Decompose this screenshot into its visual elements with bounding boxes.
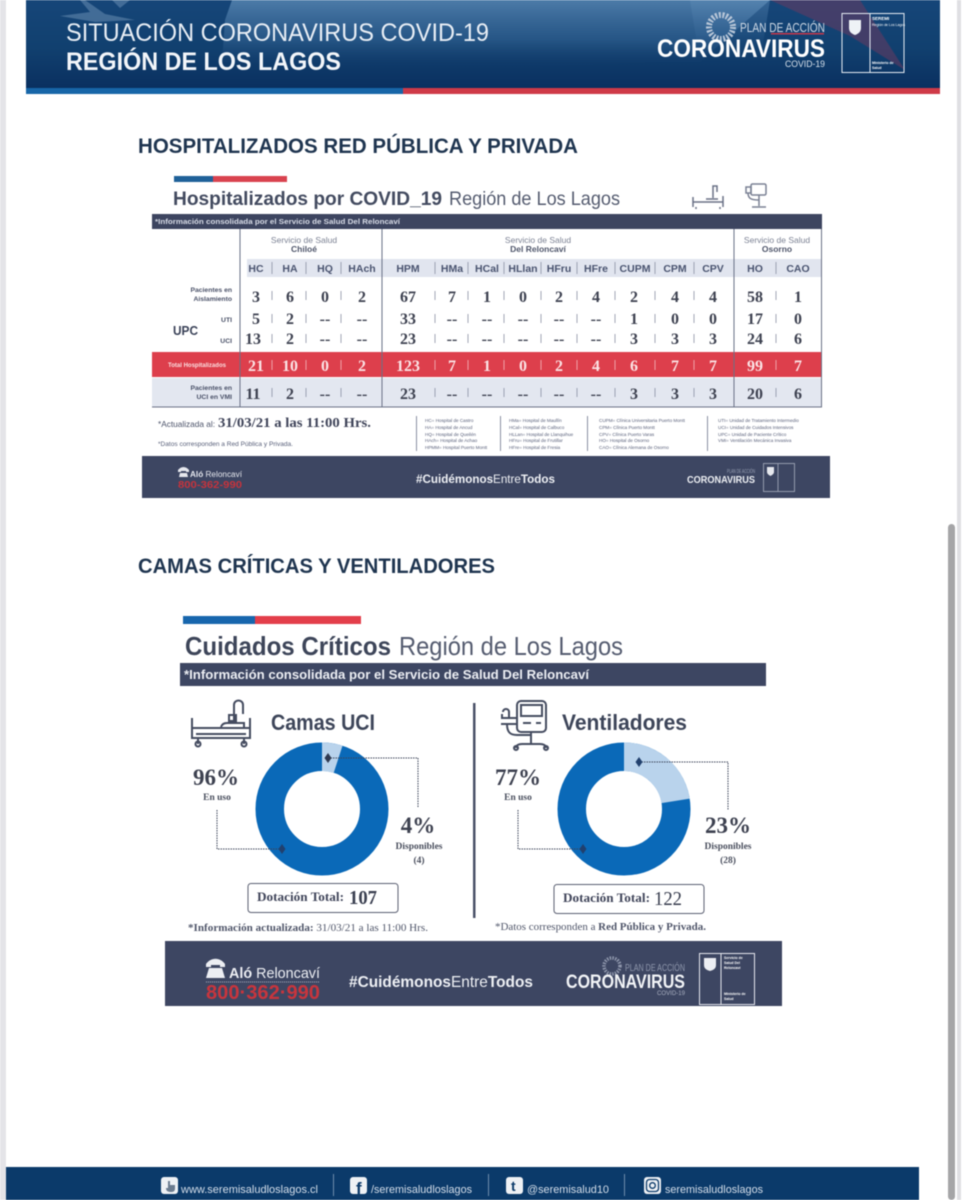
update note: 31/03/21 a las 11:00 Hrs. bbox=[218, 415, 371, 430]
table info bar: *Información consolidada por el Servicio de Salud Del Reloncaví bbox=[155, 219, 401, 226]
panel title bbox=[185, 631, 623, 661]
row labels: UTI bbox=[221, 317, 232, 324]
row: pacientes en uci en vmi: -- bbox=[320, 386, 330, 403]
row: total hospitalizados: 6 bbox=[630, 358, 638, 375]
header logo: seremi de salud: Región de Los Lagos bbox=[872, 23, 905, 27]
column headers: HC bbox=[248, 263, 264, 275]
header logo: plan de acción coronavirus: CORONAVIRUS bbox=[657, 35, 825, 63]
row: pacientes en aislamiento: 4 bbox=[592, 289, 600, 306]
row: pacientes en aislamiento: 6 bbox=[286, 289, 294, 306]
row labels: Pacientes en bbox=[190, 385, 232, 392]
row labels: Aislamiento bbox=[193, 296, 232, 303]
icon: hospital bed small bbox=[693, 186, 723, 209]
row: total hospitalizados: 1 bbox=[483, 358, 491, 375]
total box: 122 bbox=[654, 888, 682, 910]
divider bbox=[473, 703, 476, 918]
row: pacientes en aislamiento bbox=[252, 289, 802, 306]
column headers: CPM bbox=[663, 263, 687, 275]
panel: cuidados críticos bbox=[165, 616, 782, 1006]
table title: Región de Los Lagos bbox=[449, 188, 620, 210]
row: pacientes en uci en vmi: 6 bbox=[794, 386, 802, 403]
hashtag: #CuidémonosEntreTodos bbox=[349, 974, 533, 991]
facebook bbox=[350, 1177, 472, 1198]
title stripe bbox=[174, 176, 287, 182]
glossary: CAO= Clínica Alemana de Osorno bbox=[599, 445, 669, 450]
alo reloncavi: 800·362·990 bbox=[206, 982, 320, 1004]
glossary: HC= Hospital de Castro bbox=[425, 418, 474, 423]
header title: SITUACIÓN CORONAVIRUS COVID-19 bbox=[66, 18, 489, 47]
logo: servicio de salud: Ministerio de bbox=[724, 992, 746, 996]
row: pacientes en uci en vmi: -- bbox=[518, 386, 528, 403]
row: total hospitalizados: 4 bbox=[592, 358, 600, 375]
column headers: HA bbox=[282, 263, 298, 275]
section: camas uci bbox=[188, 700, 443, 934]
row: uti: -- bbox=[482, 311, 492, 328]
column headers bbox=[248, 263, 810, 275]
row: pacientes en aislamiento: 2 bbox=[358, 289, 366, 306]
glossary: HMa= Hospital de Maullín bbox=[509, 418, 562, 423]
callout: en uso bbox=[495, 765, 586, 854]
row: uti: -- bbox=[357, 311, 367, 328]
header stripe bbox=[26, 88, 940, 94]
row: uci: -- bbox=[554, 331, 564, 348]
icon: facebook: f bbox=[356, 1179, 362, 1198]
logo: plan de acción coronavirus: PLAN DE ACCIÓN bbox=[625, 961, 685, 974]
row labels: UCI en VMI bbox=[196, 394, 232, 401]
glossary: HLLan= Hospital de Llanquihue bbox=[509, 432, 574, 437]
row: pacientes en aislamiento: 1 bbox=[483, 289, 491, 306]
heading: hospitalizados: HOSPITALIZADOS RED PÚBLICA Y PRIVADA bbox=[138, 133, 578, 158]
column headers: HAch bbox=[348, 263, 376, 275]
column headers: HCal bbox=[475, 263, 499, 275]
glossary: HPMM= Hospital Puerto Montt bbox=[425, 445, 488, 450]
alo reloncavi bbox=[206, 966, 320, 1004]
row: pacientes en uci en vmi: -- bbox=[357, 386, 367, 403]
row: pacientes en aislamiento: 7 bbox=[448, 289, 456, 306]
callout: en uso bbox=[193, 765, 286, 854]
donut chart: camas uci bbox=[270, 742, 374, 861]
glossary: UTI= Unidad de Tratamiento Intermedio bbox=[718, 418, 799, 423]
logo: servicio de salud: Servicio de bbox=[724, 956, 743, 960]
total box: Dotación Total: bbox=[257, 890, 344, 904]
update note bbox=[158, 415, 371, 448]
row: pacientes en aislamiento: 58 bbox=[747, 289, 763, 306]
column headers: HMa bbox=[441, 263, 463, 275]
logo: servicio de salud: Reloncaví bbox=[724, 966, 742, 970]
row: pacientes en uci en vmi: 3 bbox=[671, 386, 679, 403]
header logo: seremi de salud: SEREMI bbox=[872, 16, 889, 21]
row: uti: -- bbox=[447, 311, 457, 328]
callout: disponibles: (28) bbox=[720, 855, 736, 866]
footer band: table: Aló Reloncaví bbox=[190, 470, 243, 479]
table info bar bbox=[152, 214, 822, 229]
total row band bbox=[152, 352, 822, 377]
header logo: seremi de salud: Ministerio de bbox=[872, 61, 894, 65]
scrollbar bbox=[948, 524, 955, 1200]
row: uti: -- bbox=[591, 311, 601, 328]
table title bbox=[173, 188, 620, 210]
row: pacientes en aislamiento: 2 bbox=[630, 289, 638, 306]
website: www.seremisaludloslagos.cl bbox=[180, 1184, 318, 1196]
row: pacientes en aislamiento: 0 bbox=[519, 289, 527, 306]
row: uti: -- bbox=[554, 311, 564, 328]
instagram bbox=[644, 1177, 763, 1196]
row: pacientes en uci en vmi: 20 bbox=[747, 386, 763, 403]
row: uti: 0 bbox=[709, 311, 717, 328]
column headers: CAO bbox=[786, 263, 810, 275]
callout: en uso: En uso bbox=[203, 793, 231, 803]
row: uci: 13 bbox=[245, 331, 261, 348]
row: pacientes en uci en vmi: 2 bbox=[286, 386, 294, 403]
row: pacientes en aislamiento: 3 bbox=[252, 289, 260, 306]
logo: plan de acción coronavirus: COVID-19 bbox=[657, 990, 685, 997]
glossary: HAch= Hospital de Achao bbox=[425, 438, 478, 443]
footer band: table: CORONAVIRUS bbox=[687, 474, 755, 486]
callout: en uso: 96% bbox=[193, 765, 239, 790]
footer band: table: 800-362-990 bbox=[178, 480, 242, 491]
info bar: *Información consolidada por el Servicio de Salud Del Reloncaví bbox=[184, 668, 590, 682]
info bar bbox=[180, 663, 766, 686]
row: total hospitalizados: 10 bbox=[282, 358, 298, 375]
alo reloncavi: Aló Reloncaví bbox=[229, 966, 320, 982]
row: uti: 0 bbox=[794, 311, 802, 328]
logo: servicio de salud: Salud bbox=[724, 997, 734, 1001]
row: total hospitalizados: 0 bbox=[519, 358, 527, 375]
logo: servicio de salud bbox=[700, 954, 754, 1004]
row: pacientes en uci en vmi: 23 bbox=[400, 386, 416, 403]
glossary: CPM= Clínica Puerto Montt bbox=[599, 425, 656, 430]
row: uci bbox=[245, 331, 802, 348]
icon: ventilator bbox=[501, 701, 548, 750]
label: camas uci: Camas UCI bbox=[271, 710, 375, 735]
callout: disponibles: (4) bbox=[413, 855, 425, 866]
row: pacientes en uci en vmi: -- bbox=[591, 386, 601, 403]
header logo: seremi de salud bbox=[842, 14, 905, 72]
page footer bbox=[6, 1167, 919, 1200]
row: uci: -- bbox=[447, 331, 457, 348]
service headers bbox=[271, 235, 810, 254]
row: pacientes en uci en vmi: -- bbox=[447, 386, 457, 403]
row: pacientes en aislamiento: 4 bbox=[709, 289, 717, 306]
row: uti: 2 bbox=[286, 311, 294, 328]
vmi row band bbox=[152, 378, 822, 407]
section: ventiladores bbox=[495, 701, 752, 933]
row: uci: -- bbox=[320, 331, 330, 348]
glossary: HFre= Hospital de Fresia bbox=[509, 445, 561, 450]
total box: 107 bbox=[349, 887, 377, 909]
icon: instagram bbox=[644, 1177, 661, 1194]
header logo: plan de acción coronavirus: PLAN DE ACCIÓN bbox=[740, 20, 825, 35]
glossary: HFru= Hospital de Frutillar bbox=[509, 438, 563, 443]
row: uti: 1 bbox=[630, 311, 638, 328]
row: uci: 3 bbox=[630, 331, 638, 348]
callout: disponibles: Disponibles bbox=[704, 842, 752, 852]
row: uci: 2 bbox=[286, 331, 294, 348]
row: uti: 17 bbox=[747, 311, 763, 328]
donut chart: ventiladores bbox=[572, 742, 690, 861]
column headers: HFru bbox=[547, 263, 571, 275]
row: uci: 3 bbox=[671, 331, 679, 348]
row: uci: -- bbox=[518, 331, 528, 348]
icon: phone bbox=[178, 467, 189, 477]
note: datos corresponden: *Datos corresponden a Red Pública y Privada. bbox=[495, 922, 707, 933]
row: pacientes en uci en vmi: 3 bbox=[630, 386, 638, 403]
row: total hospitalizados: 0 bbox=[321, 358, 329, 375]
header logo: plan de acción coronavirus: COVID-19 bbox=[785, 59, 825, 69]
label: upc: UPC bbox=[173, 323, 199, 338]
total box bbox=[554, 884, 704, 914]
column headers: HQ bbox=[317, 263, 333, 275]
glossary: CUPM= Clínica Universitaria Puerto Montt bbox=[599, 418, 686, 423]
service headers: Osorno bbox=[762, 244, 792, 254]
callout: disponibles: 4% bbox=[401, 813, 435, 838]
row: uci: -- bbox=[591, 331, 601, 348]
footer band: cuidados críticos bbox=[165, 941, 782, 1006]
label: total hospitalizados: Total Hospitalizados bbox=[168, 363, 227, 369]
row: total hospitalizados: 2 bbox=[555, 358, 563, 375]
row: total hospitalizados: 21 bbox=[248, 358, 264, 375]
row: pacientes en uci en vmi: 3 bbox=[709, 386, 717, 403]
row: uci: -- bbox=[482, 331, 492, 348]
icon: phone bbox=[206, 959, 225, 978]
panel title: Región de Los Lagos bbox=[399, 631, 623, 661]
label: ventiladores: Ventiladores bbox=[562, 710, 687, 735]
glossary: HA= Hospital de Ancud bbox=[425, 425, 473, 430]
twitter: @seremisalud10 bbox=[527, 1184, 609, 1196]
row: uci: 6 bbox=[794, 331, 802, 348]
icon: hospital bed bbox=[192, 700, 250, 746]
glossary: HO= Hospital de Osorno bbox=[599, 438, 650, 443]
row: uti bbox=[252, 311, 802, 328]
column headers: HLlan bbox=[508, 263, 538, 275]
table title: Hospitalizados por COVID_19 bbox=[173, 188, 442, 210]
panel: hospitalizados table bbox=[142, 176, 830, 498]
row: pacientes en aislamiento: 1 bbox=[794, 289, 802, 306]
row labels: Pacientes en bbox=[190, 287, 232, 294]
footer band: table: PLAN DE ACCIÓN bbox=[727, 468, 755, 475]
heading: camas críticas: CAMAS CRÍTICAS Y VENTILADORES bbox=[138, 553, 495, 578]
row: pacientes en uci en vmi bbox=[245, 386, 802, 403]
note: información actualizada: *Información actualizada: 31/03/21 a las 11:00 Hrs. bbox=[188, 923, 428, 934]
icon: tumblr: t bbox=[511, 1178, 516, 1194]
row: pacientes en aislamiento: 0 bbox=[321, 289, 329, 306]
row: uci: 23 bbox=[400, 331, 416, 348]
row: total hospitalizados: 2 bbox=[358, 358, 366, 375]
service headers: Servicio de Salud bbox=[744, 235, 810, 245]
callout: en uso: 77% bbox=[495, 765, 541, 790]
callout: disponibles bbox=[636, 757, 752, 866]
total box: Dotación Total: bbox=[563, 891, 650, 905]
row: pacientes en uci en vmi: 11 bbox=[245, 386, 261, 403]
logo: plan de acción coronavirus bbox=[566, 958, 685, 997]
header banner bbox=[26, 0, 940, 94]
website bbox=[161, 1177, 318, 1196]
logo: servicio de salud: Salud Del bbox=[724, 961, 740, 965]
table header band bbox=[247, 259, 822, 277]
title stripe bbox=[183, 616, 361, 624]
row: uci: 24 bbox=[747, 331, 763, 348]
row: pacientes en uci en vmi: -- bbox=[482, 386, 492, 403]
glossary: UCI= Unidad de Cuidados Intensivos bbox=[718, 425, 794, 430]
row labels bbox=[190, 287, 232, 401]
twitter bbox=[506, 1177, 609, 1196]
icon: ventilator small bbox=[746, 184, 766, 207]
column headers: CUPM bbox=[620, 263, 651, 275]
row labels: UCI bbox=[220, 338, 232, 345]
row: uti: 0 bbox=[671, 311, 679, 328]
callout: en uso: En uso bbox=[504, 793, 532, 803]
row: uti: -- bbox=[518, 311, 528, 328]
glossary bbox=[416, 416, 799, 451]
icon: web bbox=[161, 1177, 178, 1194]
service headers: Chiloé bbox=[291, 244, 317, 254]
column headers: CPV bbox=[702, 263, 724, 275]
logo: plan de acción coronavirus: CORONAVIRUS bbox=[566, 972, 685, 993]
update note: *Datos corresponden a Red Pública y Privada. bbox=[158, 442, 293, 448]
row: pacientes en aislamiento: 2 bbox=[555, 289, 563, 306]
column headers: HPM bbox=[396, 263, 420, 275]
row: total hospitalizados: 99 bbox=[747, 358, 763, 375]
footer band: table bbox=[142, 456, 830, 498]
header logo: plan de acción coronavirus bbox=[657, 15, 825, 69]
glossary: VMI= Ventilación Mecánica Invasiva bbox=[718, 438, 792, 443]
service headers: Servicio de Salud bbox=[271, 235, 337, 245]
callout: disponibles: 23% bbox=[705, 813, 751, 838]
row: total hospitalizados bbox=[248, 358, 802, 375]
row: uti: 5 bbox=[252, 311, 260, 328]
glossary: HQ= Hospital de Queilén bbox=[425, 432, 476, 437]
row: total hospitalizados: 123 bbox=[396, 358, 420, 375]
row: pacientes en aislamiento: 4 bbox=[671, 289, 679, 306]
callout: disponibles bbox=[324, 753, 443, 866]
glossary: UPC= Unidad de Paciente Crítico bbox=[718, 432, 787, 437]
glossary: CPV= Clínica Puerto Varas bbox=[599, 432, 655, 437]
footer band: table: #CuidémonosEntreTodos bbox=[416, 472, 555, 486]
row: total hospitalizados: 7 bbox=[794, 358, 802, 375]
service headers: Servicio de Salud bbox=[505, 235, 571, 245]
glossary: HCal= Hospital de Calbuco bbox=[509, 425, 565, 430]
row: total hospitalizados: 7 bbox=[671, 358, 679, 375]
instagram: seremisaludloslagos bbox=[665, 1184, 763, 1196]
row: total hospitalizados: 7 bbox=[709, 358, 717, 375]
column headers: HO bbox=[747, 263, 763, 275]
header title: REGIÓN DE LOS LAGOS bbox=[66, 46, 341, 76]
row: uti: -- bbox=[320, 311, 330, 328]
column headers: HFre bbox=[584, 263, 608, 275]
panel title: Cuidados Críticos bbox=[185, 631, 391, 661]
header title bbox=[66, 18, 489, 76]
facebook: /seremisaludloslagos bbox=[371, 1184, 472, 1196]
callout: disponibles: Disponibles bbox=[396, 842, 443, 852]
row: pacientes en aislamiento: 67 bbox=[400, 289, 416, 306]
header logo: seremi de salud: Salud bbox=[872, 66, 882, 70]
service headers: Del Reloncaví bbox=[510, 244, 567, 254]
update note: *Actualizada al: bbox=[158, 419, 215, 429]
total box bbox=[248, 884, 398, 912]
row: total hospitalizados: 7 bbox=[448, 358, 456, 375]
row: uci: -- bbox=[357, 331, 367, 348]
row: pacientes en uci en vmi: -- bbox=[554, 386, 564, 403]
row: uci: 3 bbox=[709, 331, 717, 348]
row: uti: 33 bbox=[400, 311, 416, 328]
